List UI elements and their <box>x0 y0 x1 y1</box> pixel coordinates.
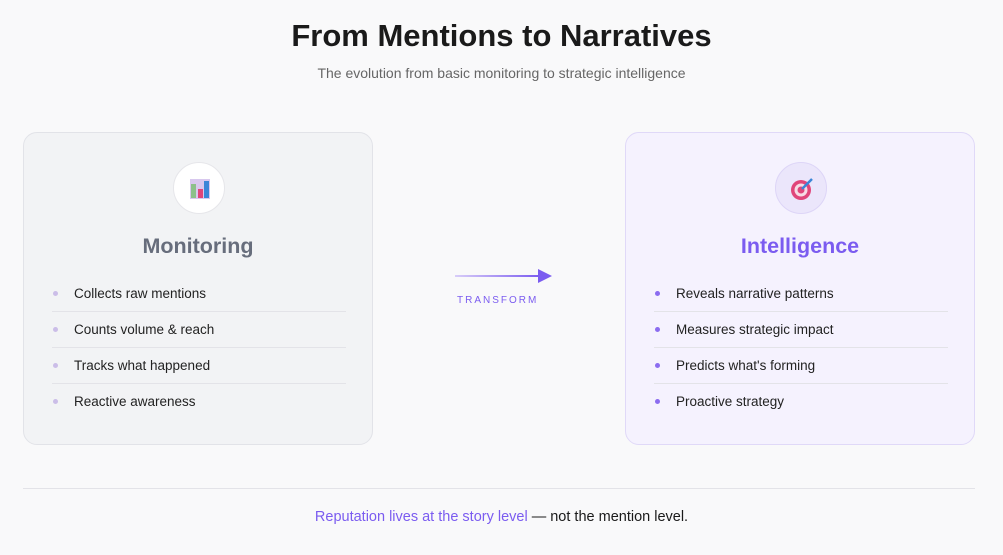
list: intelligence <box>654 286 948 409</box>
list: monitoring: Tracks what happened <box>74 358 210 373</box>
tagline: Reputation lives at the story level — not the mention level. <box>315 509 688 525</box>
icon: target <box>775 162 827 214</box>
list: monitoring: Reactive awareness <box>74 394 196 409</box>
list: intelligence: Predicts what's forming <box>676 358 815 373</box>
list: intelligence: Proactive strategy <box>676 394 784 409</box>
title: From Mentions to Narratives <box>291 18 712 53</box>
list: intelligence: Measures strategic impact <box>676 322 834 337</box>
heading: monitoring: Monitoring <box>142 234 254 258</box>
list: monitoring: Collects raw mentions <box>74 286 206 301</box>
panel: intelligence <box>625 132 975 445</box>
arrow: transform: TRANSFORM <box>457 295 538 306</box>
list: monitoring: Counts volume & reach <box>74 322 214 337</box>
list: monitoring <box>52 286 346 409</box>
divider line <box>23 488 975 489</box>
icon: bar chart <box>173 162 225 214</box>
heading: intelligence: Intelligence <box>741 234 859 258</box>
panel: monitoring <box>23 132 373 445</box>
list: intelligence: Reveals narrative patterns <box>676 286 834 301</box>
arrow: transform <box>455 269 552 306</box>
subtitle: The evolution from basic monitoring to strategic intelligence <box>317 65 686 81</box>
